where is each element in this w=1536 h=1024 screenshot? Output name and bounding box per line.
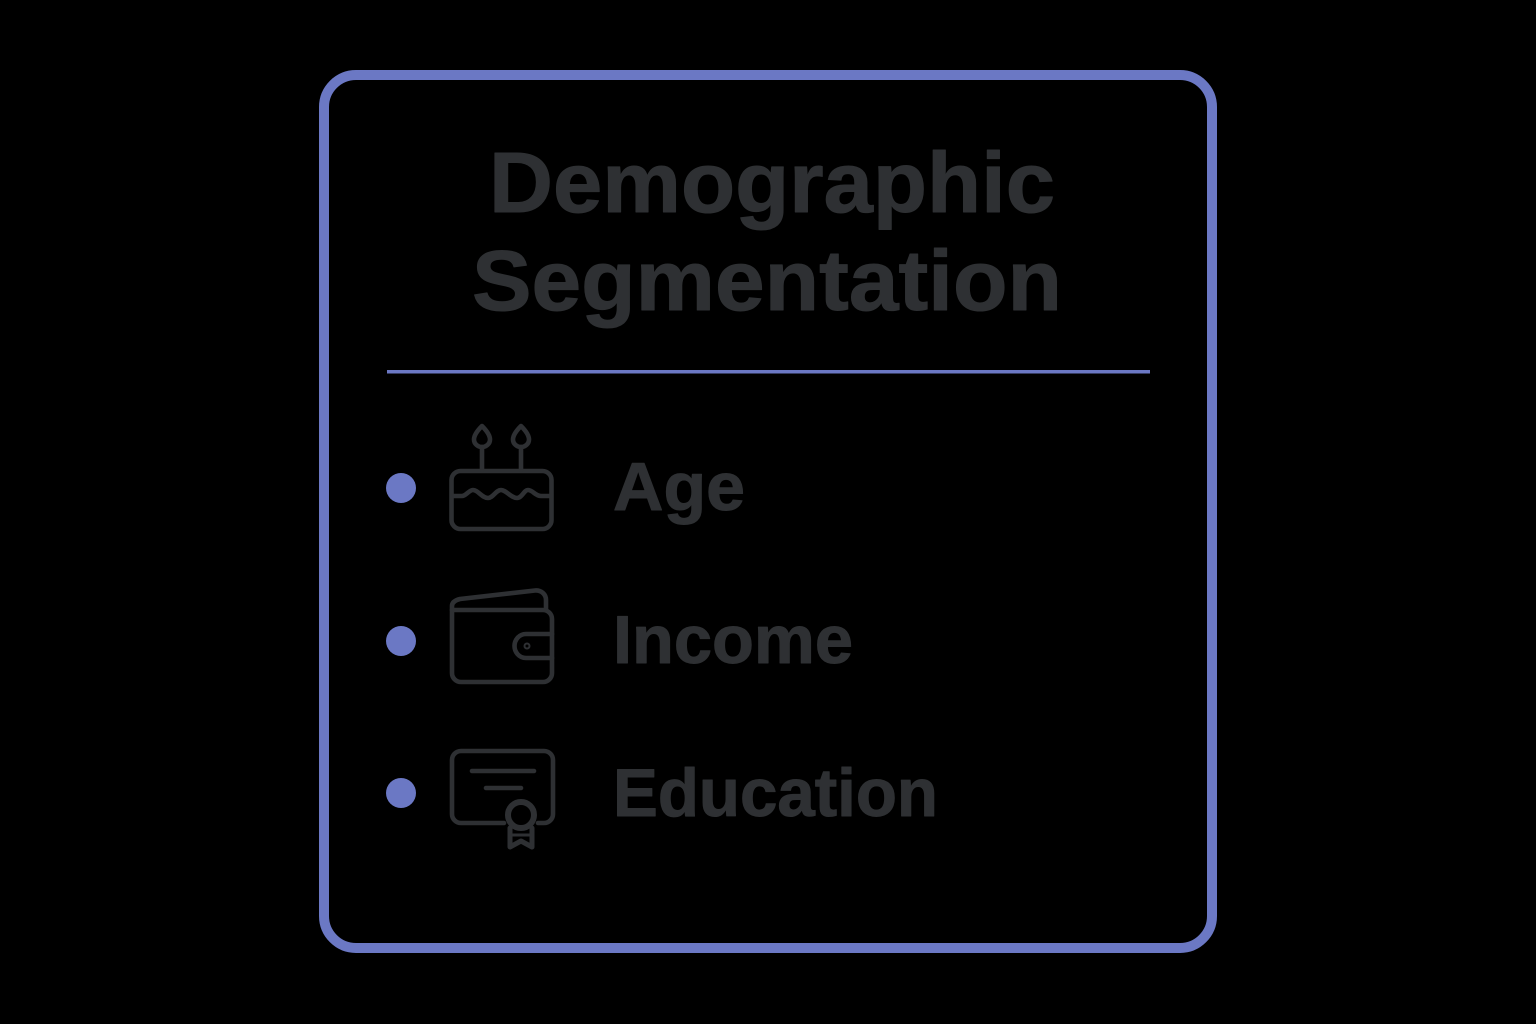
icon: birthday cake: [452, 426, 552, 529]
label: income: Income: [613, 602, 853, 678]
title: Segmentation: [472, 234, 1062, 329]
icon: certificate: [452, 751, 553, 847]
title: [472, 136, 1062, 329]
label: education: Education: [613, 755, 938, 831]
list item: income: [386, 590, 853, 682]
label: age: Age: [613, 449, 745, 525]
panel: demographic segmentation card: [324, 75, 1212, 948]
bullet: age: [386, 473, 416, 503]
bullet: income: [386, 626, 416, 656]
list item: education: [386, 751, 938, 847]
bullet: education: [386, 778, 416, 808]
list item: age: [386, 426, 745, 529]
icon: wallet: [452, 590, 552, 682]
title: Demographic: [489, 136, 1055, 231]
